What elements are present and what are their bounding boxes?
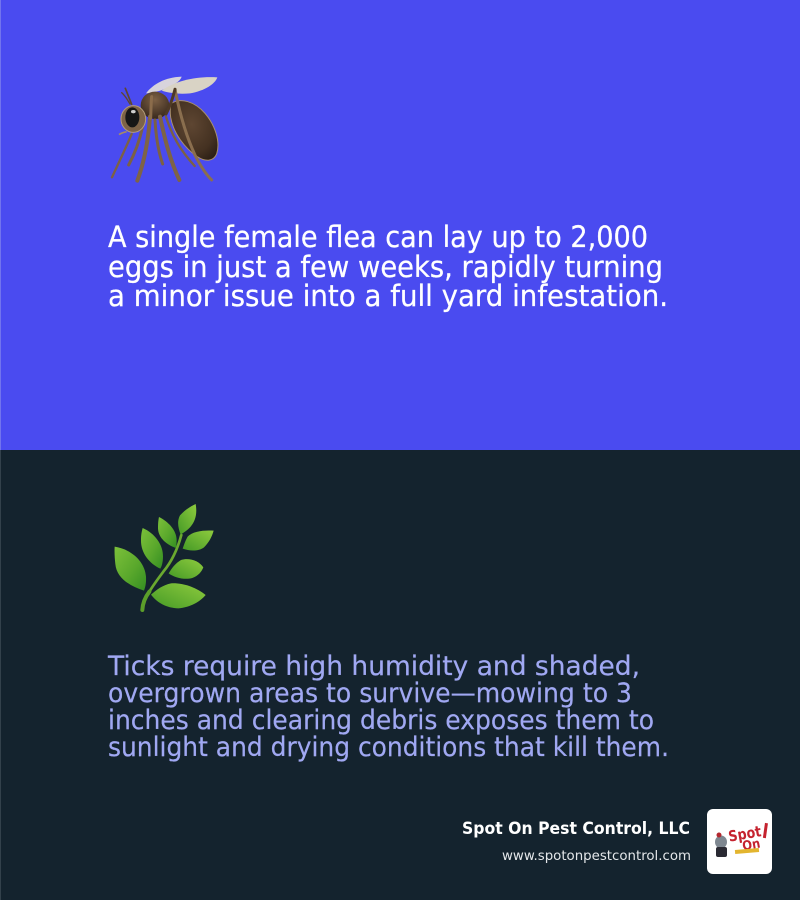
icon: mosquito xyxy=(112,77,218,181)
text: flea fact: A single female flea can lay up to 2,000 xyxy=(108,220,648,254)
text: tick fact: Ticks require high humidity and shaded, xyxy=(107,651,640,682)
panel: tick fact background xyxy=(0,450,800,900)
icon: leafy sprig xyxy=(115,504,214,610)
text: tick fact: sunlight and drying conditions that kill them. xyxy=(108,732,669,763)
icon: company logo: On xyxy=(741,837,762,854)
text: tick fact: overgrown areas to survive—mowing to 3 xyxy=(108,678,632,709)
text: website: www.spotonpestcontrol.com xyxy=(502,849,691,864)
icon: company logo xyxy=(707,809,772,874)
text: flea fact: a minor issue into a full yard infestation. xyxy=(108,279,668,313)
text: tick fact: inches and clearing debris exposes them to xyxy=(108,705,654,736)
text: company name: Spot On Pest Control, LLC xyxy=(462,819,690,838)
text: flea fact xyxy=(108,220,668,313)
panel: flea fact background xyxy=(0,0,800,450)
icon: company logo: Spot xyxy=(727,822,763,846)
text: flea fact: eggs in just a few weeks, rapidly turning xyxy=(108,250,663,284)
text: tick fact xyxy=(107,651,669,763)
